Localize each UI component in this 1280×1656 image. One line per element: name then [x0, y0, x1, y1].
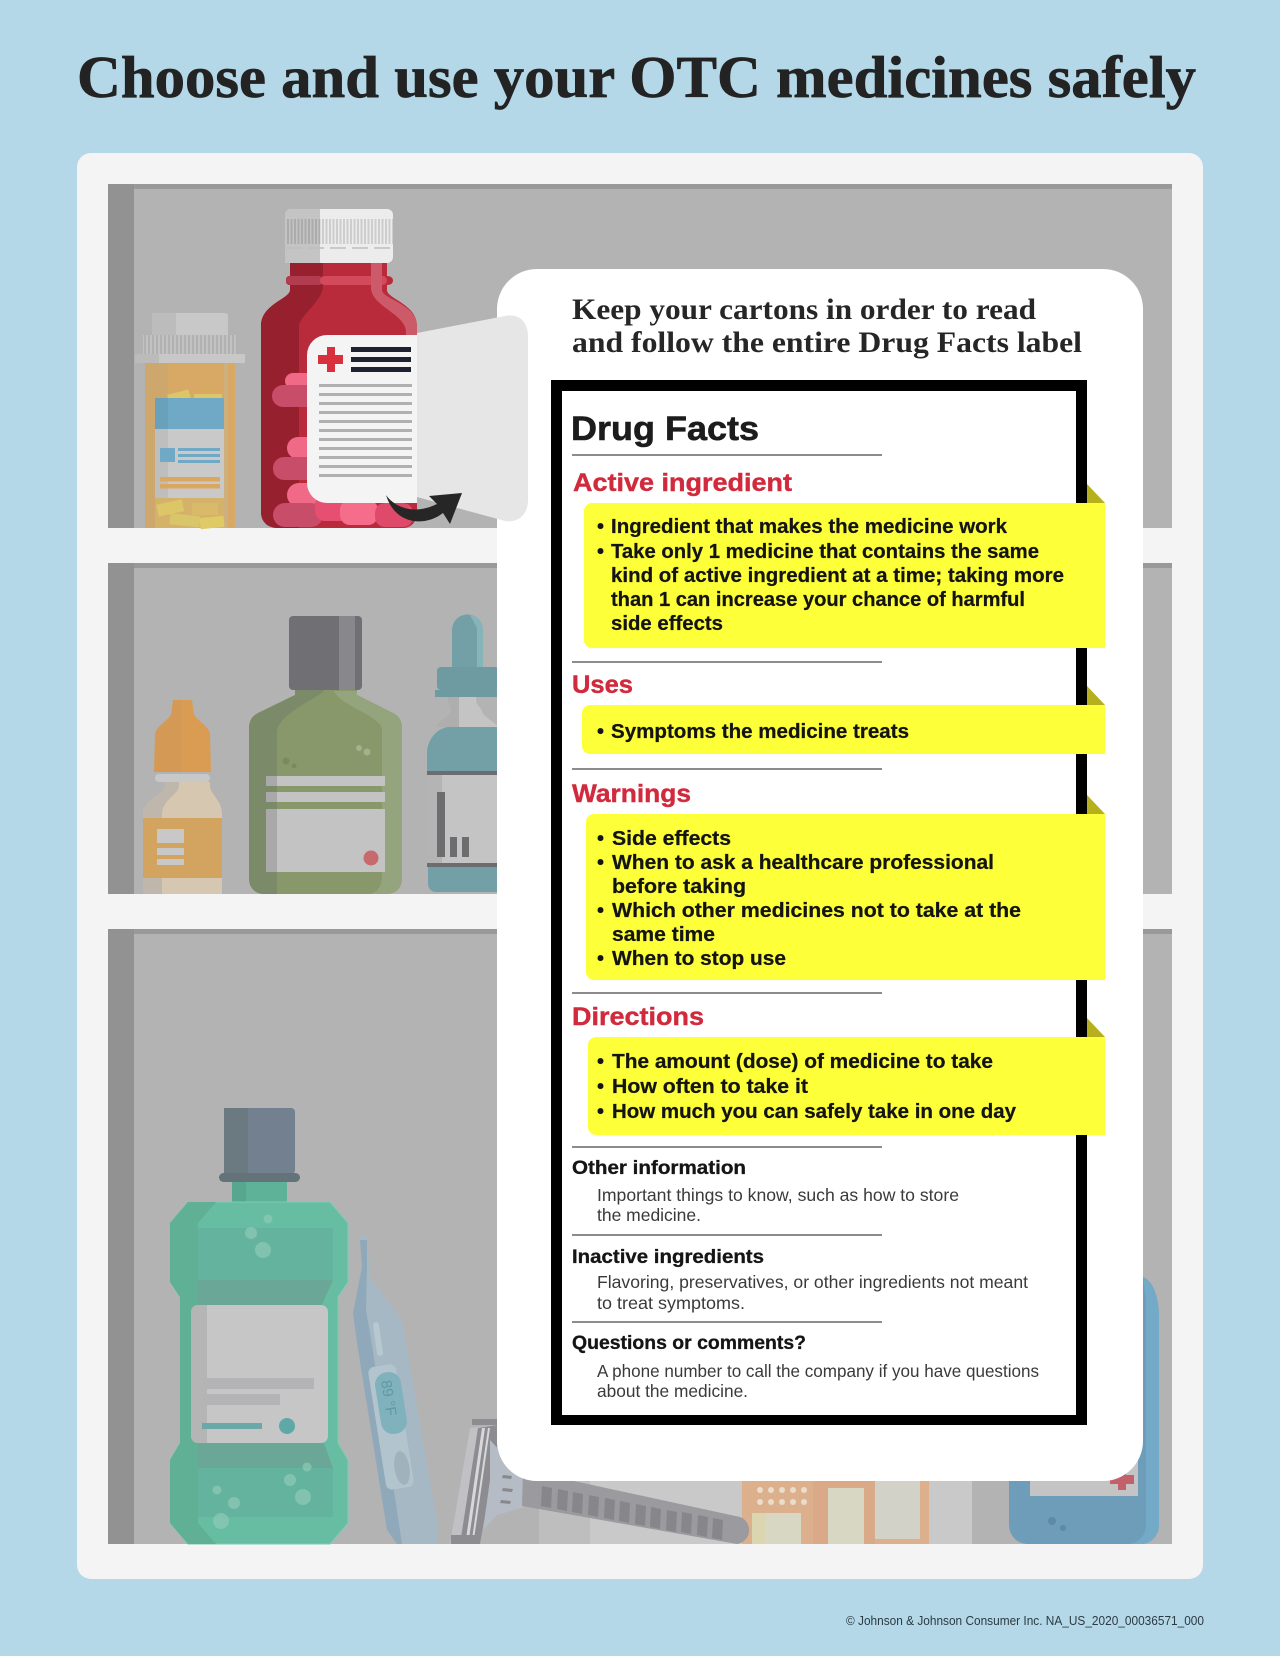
section: questions or comments — [572, 1333, 1039, 1401]
section: inactive ingredients: to treat symptoms. — [597, 1293, 745, 1313]
title: Choose and use your OTC medicines safely — [77, 44, 1196, 110]
section: inactive ingredients: Flavoring, preservatives, or other ingredients not meant — [597, 1272, 1028, 1292]
illustration: mouthwash bottle — [170, 1108, 348, 1544]
section: active ingredient — [573, 469, 1105, 648]
section: questions or comments: Questions or comments? — [572, 1333, 806, 1354]
section: uses: Uses — [572, 671, 633, 699]
section: directions: The amount (dose) of medicine to take — [612, 1051, 993, 1073]
drug facts heading: Drug Facts — [571, 410, 759, 448]
section: active ingredient: • — [597, 516, 604, 538]
pills inside red bottle — [272, 373, 413, 527]
copyright footer: © Johnson & Johnson Consumer Inc. NA_US_2020_00036571_000 — [846, 1614, 1204, 1628]
subtitle: and follow the entire Drug Facts label — [572, 326, 1082, 359]
section: warnings: Side effects — [612, 828, 731, 850]
icon: red cross — [318, 347, 343, 372]
section: inactive ingredients: Inactive ingredients — [572, 1247, 764, 1268]
section: other information: Other information — [572, 1158, 746, 1179]
section: directions: • — [597, 1076, 604, 1098]
illustration: razor — [450, 1419, 749, 1544]
section: uses: Symptoms the medicine treats — [611, 721, 909, 743]
section: active ingredient: • — [597, 541, 604, 563]
section: warnings: Which other medicines not to take at the — [612, 900, 1021, 922]
section: active ingredient: Take only 1 medicine that contains the same — [611, 541, 1039, 563]
section: active ingredient: kind of active ingredient at a time; taking more — [611, 565, 1064, 587]
shelf compartment: top — [108, 184, 1172, 528]
drug facts label border — [551, 380, 1087, 1425]
section: active ingredient: Active ingredient — [573, 469, 793, 497]
shelf compartment: middle — [108, 563, 1172, 894]
background band behind razor and boxes — [539, 1470, 742, 1544]
section: warnings: Warnings — [572, 780, 691, 808]
illustration: red medicine bottle — [261, 209, 417, 528]
section: uses — [572, 671, 1105, 754]
arrow: open carton — [386, 493, 462, 524]
section: warnings: When to stop use — [612, 948, 786, 970]
section: directions — [572, 1003, 1105, 1135]
illustration: carton flap opening — [307, 315, 528, 521]
section: directions: • — [597, 1101, 604, 1123]
razor grip ticks — [541, 1486, 723, 1540]
section: warnings: • — [597, 900, 604, 922]
illustration: teal dropper bottle — [427, 614, 502, 892]
section: active ingredient: Ingredient that makes the medicine work — [611, 516, 1008, 538]
section: warnings: • — [597, 948, 604, 970]
section: other information: the medicine. — [597, 1205, 701, 1225]
section: warnings: before taking — [612, 876, 746, 898]
section: uses: • — [597, 721, 604, 743]
illustration: green bottle — [249, 616, 402, 894]
section: inactive ingredients — [572, 1247, 1028, 1313]
section: active ingredient: side effects — [611, 613, 723, 635]
subtitle: Keep your cartons in order to read — [572, 293, 1036, 326]
section: warnings: • — [597, 828, 604, 850]
section: other information — [572, 1158, 959, 1225]
illustration: blue bottle — [1009, 1277, 1159, 1544]
section: warnings: When to ask a healthcare professional — [612, 852, 994, 874]
illustration: thermometer — [353, 1235, 438, 1544]
razor handle — [522, 1470, 749, 1544]
section: warnings: • — [597, 852, 604, 874]
section: directions: Directions — [572, 1003, 704, 1031]
razor neck — [483, 1440, 525, 1530]
illustration: orange dropper bottle — [143, 700, 222, 894]
section: questions or comments: A phone number to call the company if you have questions — [597, 1361, 1039, 1381]
section: questions or comments: about the medicine. — [597, 1381, 748, 1401]
section: directions: • — [597, 1051, 604, 1073]
panel: medicine cabinet — [77, 153, 1203, 1579]
section: active ingredient: than 1 can increase your chance of harmful — [611, 589, 1025, 611]
illustration: thermometer: 89 °F — [377, 1379, 399, 1417]
section: directions: How often to take it — [612, 1076, 808, 1098]
shelf compartment: bottom — [108, 929, 1172, 1544]
section: directions: How much you can safely take in one day — [612, 1101, 1017, 1123]
section: warnings — [572, 780, 1105, 980]
section: warnings: same time — [612, 924, 715, 946]
subtitle — [572, 293, 1082, 359]
illustration: orange pill bottle — [135, 313, 245, 529]
razor head — [450, 1419, 502, 1544]
section: other information: Important things to know, such as how to store — [597, 1185, 959, 1205]
illustration: bandage boxes — [742, 1470, 972, 1544]
panel: white drug facts card — [497, 269, 1143, 1481]
